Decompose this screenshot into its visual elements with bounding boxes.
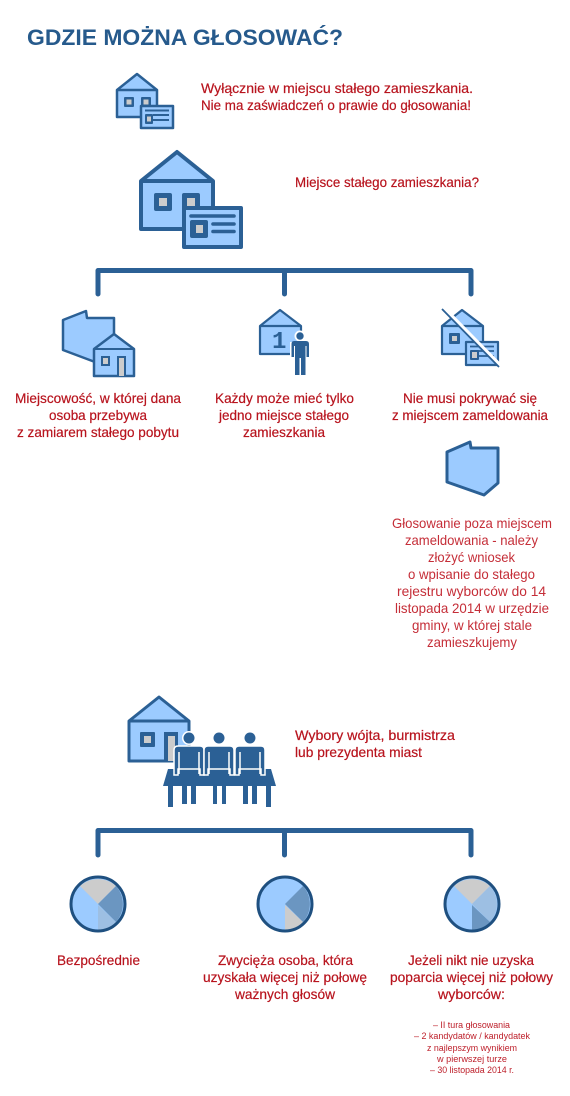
text: voting away from registered address: o wpisanie do stałego [408, 566, 535, 582]
pie icon: majority [258, 877, 312, 931]
text: one place of residence: Każdy może mieć tylko [215, 390, 354, 406]
text: definition of locality: osoba przebywa [49, 407, 147, 423]
text: registration address [392, 390, 548, 423]
text: no majority: Jeżeli nikt nie uzyska [408, 952, 534, 968]
text: registration address: z miejscem zameldowania [392, 407, 548, 423]
icon: crossed out house with ID card [442, 308, 501, 367]
text: voting away from registered address: rejestru wyborców do 14 [397, 583, 546, 599]
text: definition of locality: z zamiarem stałego pobytu [17, 424, 179, 440]
text: no majority [390, 952, 553, 1002]
text: second round details: z najlepszym wynikiem [427, 1043, 517, 1053]
text: majority winner: Zwycięża osoba, która [218, 952, 353, 968]
icon: small house with ID card [117, 74, 173, 128]
text: only at place of residence: Nie ma zaświadczeń o prawie do głosowania! [201, 97, 471, 113]
text: no majority: wyborców: [437, 986, 505, 1002]
bracket: top branches [98, 270, 471, 294]
text: voting away from registered address: zamieszkujemy [427, 634, 517, 650]
text: second round details: – 30 listopada 2014 r. [430, 1065, 514, 1075]
text: second round details [414, 1020, 530, 1075]
text: voting away from registered address: gminy, w której stale [412, 617, 532, 633]
text: voting away from registered address [392, 515, 552, 650]
text: direct: Bezpośrednie [57, 952, 140, 968]
title: GDZIE MOŻNA GŁOSOWAĆ? [27, 25, 343, 50]
text: second round details: w pierwszej turze [436, 1054, 507, 1064]
text: one place of residence: zamieszkania [243, 424, 325, 440]
text: definition of locality: Miejscowość, w której dana [15, 390, 181, 406]
question: place of residence: Miejsce stałego zamieszkania? [295, 174, 479, 190]
icon: Poland outline [447, 442, 498, 495]
text: election of mayors [295, 727, 455, 760]
text: majority winner: uzyskała więcej niż połowę [203, 969, 367, 985]
icon: Poland outline with house [63, 311, 134, 376]
text: election of mayors: Wybory wójta, burmistrza [295, 727, 455, 743]
text: second round details: – II tura głosowania [433, 1020, 510, 1030]
text: voting away from registered address: zameldowania - należy [405, 532, 538, 548]
text: voting away from registered address: złożyć wniosek [428, 549, 516, 565]
text: one place of residence [215, 390, 354, 440]
text: voting away from registered address: Głosowanie poza miejscem [392, 515, 552, 531]
text: registration address: Nie musi pokrywać się [403, 390, 537, 406]
icon: house with people at a table [129, 697, 276, 807]
text: majority winner [203, 952, 367, 1002]
text: only at place of residence [201, 80, 473, 113]
icon: large house with ID card [141, 152, 241, 247]
text: voting away from registered address: listopada 2014 w urzędzie [395, 600, 549, 616]
text: no majority: poparcia więcej niż połowy [390, 969, 553, 985]
text: majority winner: ważnych głosów [234, 986, 336, 1002]
text: second round details: – 2 kandydatów / kandydatek [414, 1031, 530, 1041]
pie icon: second round [445, 877, 499, 931]
text: election of mayors: lub prezydenta miast [295, 744, 422, 760]
bracket: bottom branches [98, 830, 471, 855]
text: one place of residence: jedno miejsce stałego [218, 407, 349, 423]
text: only at place of residence: Wyłącznie w miejscu stałego zamieszkania. [201, 80, 473, 96]
icon: house number one and person [260, 310, 310, 375]
icon: house number one and person: 1 [272, 329, 286, 356]
text: definition of locality [15, 390, 181, 440]
pie icon: direct [71, 877, 125, 931]
